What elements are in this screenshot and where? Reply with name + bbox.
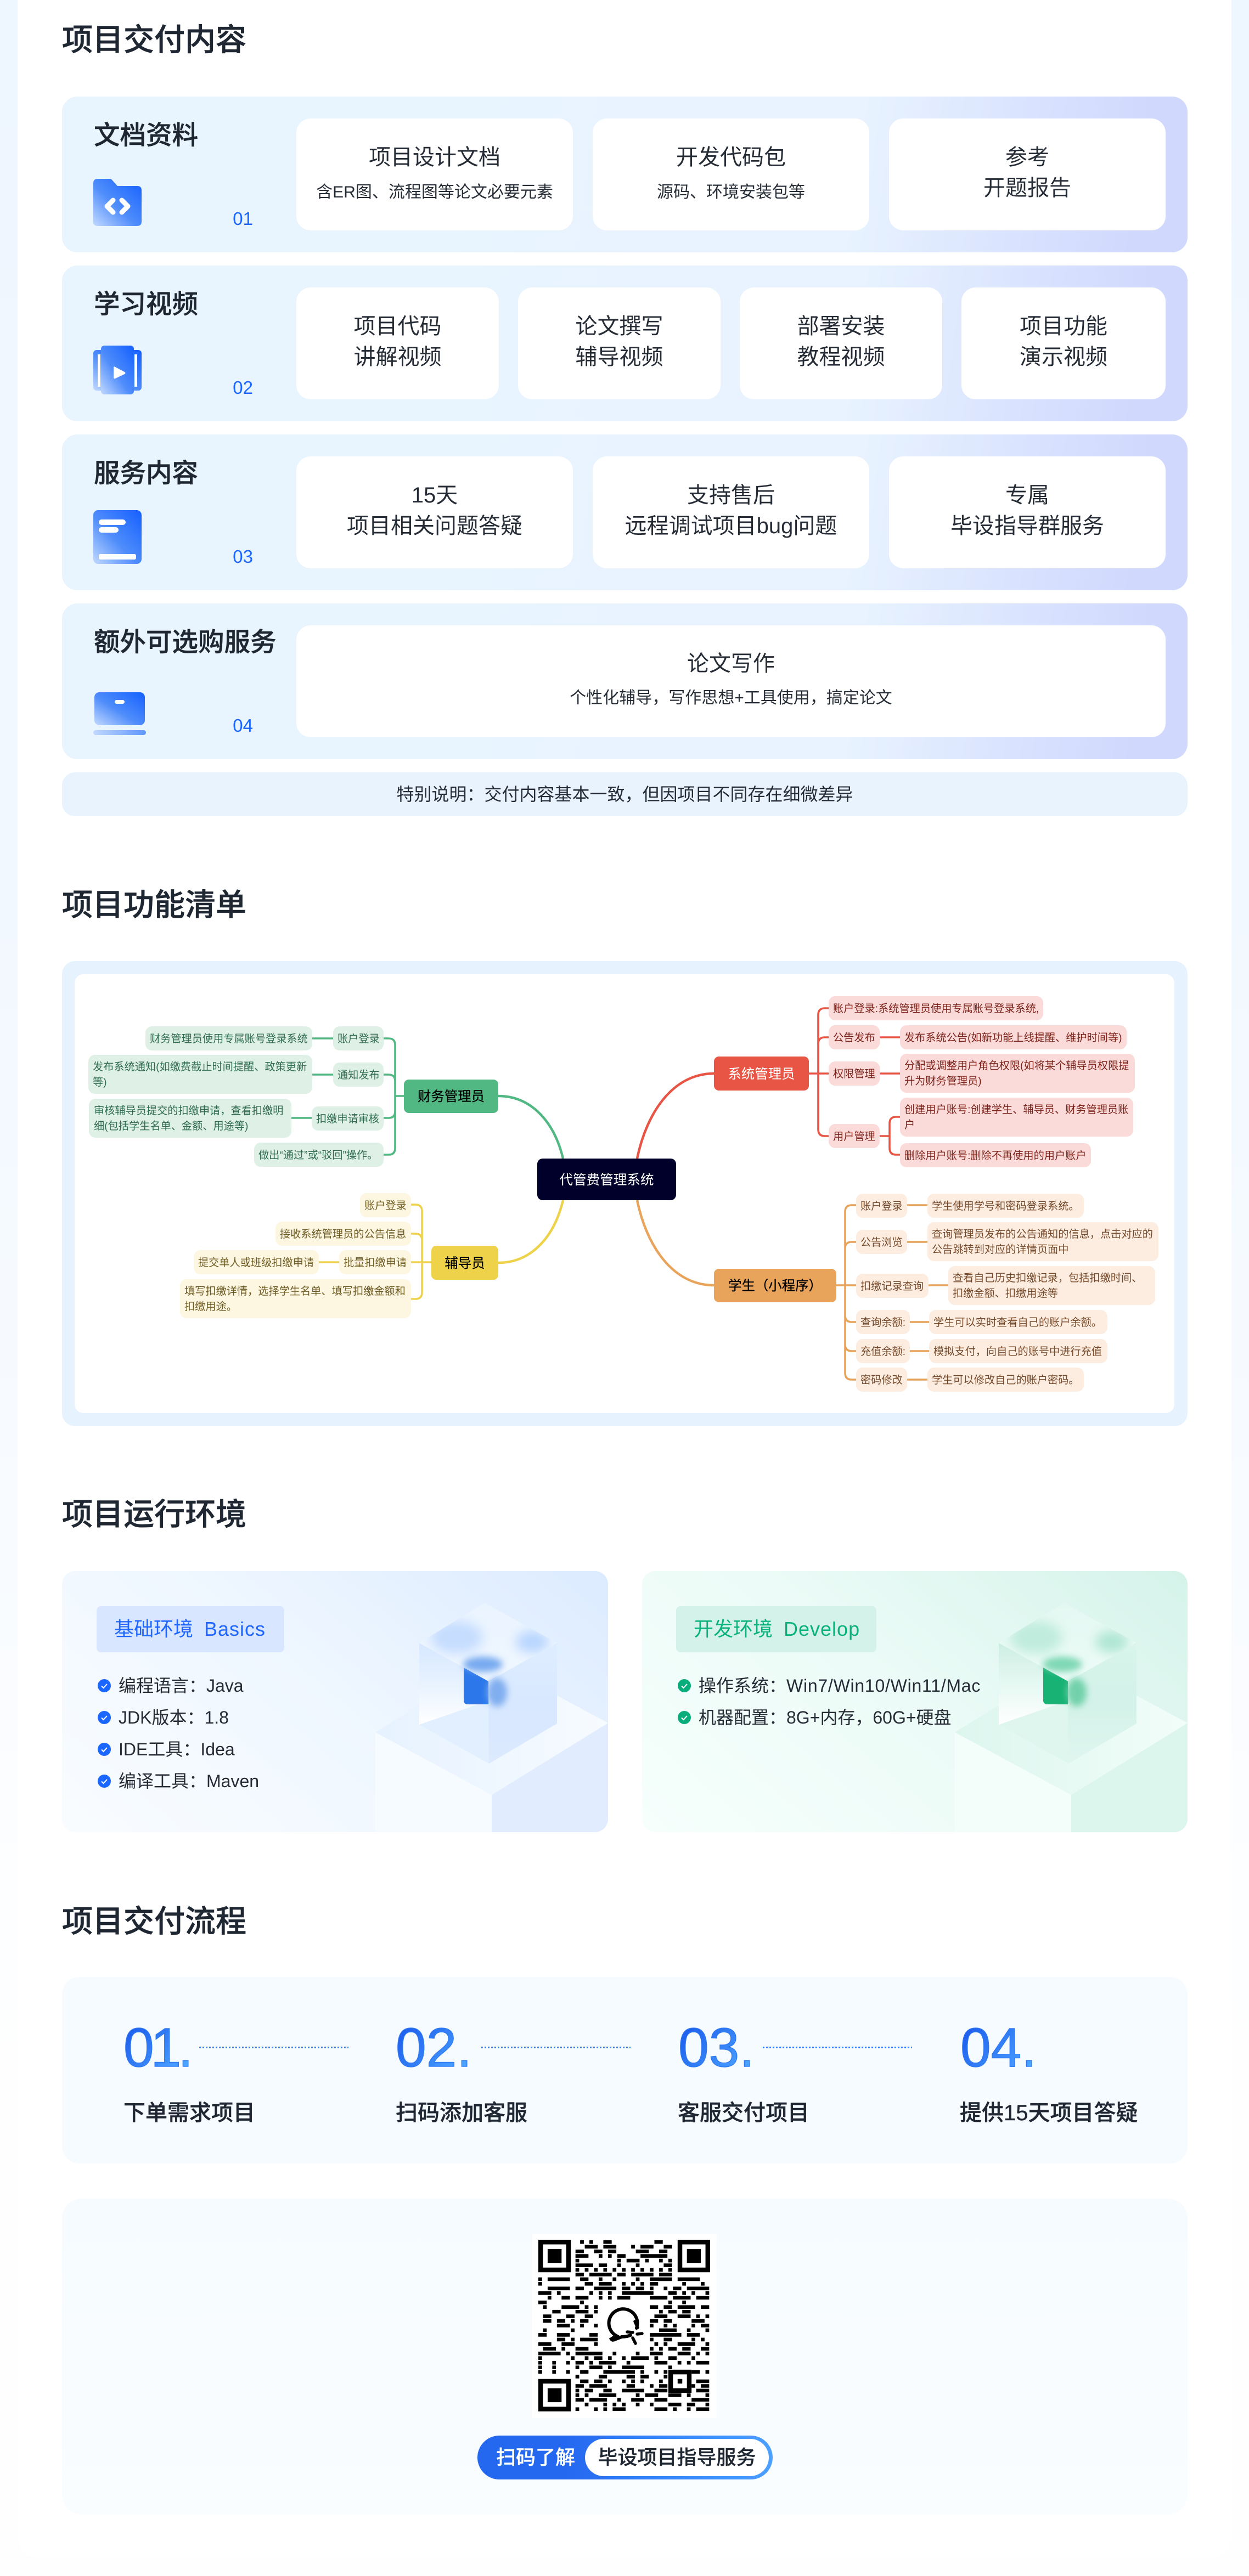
- panel: 学习视频: [62, 265, 1188, 421]
- orange leaf nodes: 扣缴记录查询: [860, 1280, 924, 1292]
- heading: 服务内容: 服务内容: [94, 459, 198, 488]
- branch node: 学生（小程序）: [714, 1269, 836, 1302]
- orange leaf nodes: 密码修改: [860, 1374, 903, 1386]
- green leaf nodes: 等): [93, 1076, 107, 1088]
- card: 部署安装教程视频: 教程视频: [797, 345, 885, 369]
- yellow leaf nodes: 接收系统管理员的公告信息: [280, 1228, 406, 1240]
- card: 论文撰写辅导视频: 论文撰写: [575, 314, 663, 338]
- branch node: 财务管理员: 财务管理员: [418, 1089, 485, 1104]
- note: 特别说明：交付内容基本一致，但因项目不同存在细微差异: [396, 784, 853, 804]
- card: 项目功能演示视频: [961, 287, 1166, 399]
- yellow leaf nodes: 账户登录: [364, 1200, 407, 1212]
- orange leaf nodes: [856, 1194, 1158, 1392]
- red leaf nodes: [829, 996, 1135, 1167]
- red leaf nodes: 删除用户账号:删除不再使用的用户账户: [904, 1150, 1087, 1162]
- card: 专属毕设指导群服务: 毕设指导群服务: [950, 514, 1104, 538]
- orange leaf nodes: 公告浏览: [860, 1236, 903, 1249]
- step number 01: 01.: [123, 2017, 190, 2078]
- card: 开发代码包: 源码、环境安装包等: [657, 183, 805, 201]
- button pill: 扫码了解 毕设项目指导服务: [477, 2436, 773, 2479]
- pill left text: 扫码了解: [496, 2446, 575, 2468]
- icon: WeCom logo: [609, 2309, 642, 2343]
- card: 15天 项目相关问题答疑: 15天: [412, 483, 458, 507]
- card: 15天 项目相关问题答疑: 项目相关问题答疑: [347, 514, 522, 538]
- card: 参考开题报告: 参考: [1005, 145, 1049, 170]
- yellow leaf nodes: 填写扣缴详情，选择学生名单、填写扣缴金额和: [184, 1285, 406, 1297]
- step number 04: 04.: [960, 2017, 1037, 2078]
- green leaf nodes: 扣缴申请审核: [316, 1113, 379, 1125]
- green leaf nodes: 细(包括学生名单、金额、用途等): [94, 1120, 248, 1132]
- heading: 文档资料: 文档资料: [94, 121, 198, 150]
- card: 专属毕设指导群服务: 专属: [1005, 483, 1049, 507]
- red leaf nodes: 用户管理: [833, 1131, 875, 1143]
- card: 论文写作: 论文写作: [687, 652, 775, 676]
- panel: 基础环境 Basics: [62, 1571, 608, 1832]
- number 03: 03: [233, 546, 253, 567]
- red leaf nodes: 公告发布: [833, 1032, 875, 1044]
- red leaf nodes: 升为财务管理员): [904, 1075, 982, 1087]
- heading: 学习视频: 学习视频: [94, 290, 198, 319]
- branch node: 系统管理员: 系统管理员: [728, 1067, 795, 1082]
- illustration: glass cube: [955, 1615, 1188, 1832]
- panel: 文档资料: [62, 97, 1188, 252]
- card: 论文写作: 个性化辅导，写作思想+工具使用，搞定论文: [570, 689, 892, 707]
- card: 论文撰写辅导视频: [518, 287, 721, 399]
- icon: laptop: [93, 692, 146, 735]
- step label 02: 扫码添加客服: [396, 2101, 527, 2125]
- label: 基础环境 Basics: 基础环境 Basics: [114, 1618, 266, 1640]
- pill right label: [585, 2439, 769, 2476]
- list item: 机器配置: 机器配置：8G+内存，60G+硬盘: [699, 1708, 952, 1727]
- icon: service doc: [93, 510, 142, 564]
- card: 参考开题报告: [889, 118, 1166, 230]
- title: 项目运行环境: 项目运行环境: [62, 1497, 246, 1532]
- panel: 开发环境 Develop: [642, 1571, 1188, 1832]
- branch node: 财务管理员: [404, 1080, 498, 1113]
- panel: QR contact: [62, 2199, 1188, 2515]
- center node: 代管费管理系统: 代管费管理系统: [559, 1172, 654, 1188]
- orange leaf nodes: 查询余额:: [860, 1317, 905, 1329]
- pill right label: 毕设项目指导服务: [598, 2446, 756, 2468]
- step number 02: 02.: [396, 2017, 472, 2078]
- connector: [481, 2047, 631, 2048]
- number 04: 04: [233, 715, 253, 736]
- orange leaf nodes: 账户登录: [860, 1200, 903, 1212]
- list item: 编译工具: 编译工具：Maven: [119, 1771, 259, 1791]
- card: 项目设计文档: 项目设计文档: [369, 145, 500, 170]
- green leaf nodes: 账户登录: [337, 1033, 380, 1045]
- list item: 操作系统: 操作系统：Win7/Win10/Win11/Mac: [699, 1676, 981, 1696]
- red leaf nodes: 账户登录:系统管理员使用专属账号登录系统,: [833, 1003, 1039, 1015]
- card: 项目设计文档: [296, 118, 573, 230]
- orange leaf nodes: 扣缴金额、扣缴用途等: [953, 1287, 1058, 1300]
- connector: [199, 2047, 348, 2048]
- orange leaf nodes: 公告跳转到对应的详情页面中: [932, 1244, 1068, 1256]
- title: 项目功能清单: 项目功能清单: [62, 888, 246, 922]
- red leaf nodes: 权限管理: [833, 1068, 875, 1080]
- card: 项目功能演示视频: 演示视频: [1020, 345, 1107, 369]
- card: 项目功能演示视频: 项目功能: [1020, 314, 1107, 338]
- card: 部署安装教程视频: 部署安装: [797, 314, 885, 338]
- green leaf nodes: 做出“通过”或“驳回”操作。: [258, 1149, 378, 1161]
- red leaf nodes: 户: [904, 1119, 915, 1131]
- card: 论文写作: [296, 625, 1166, 737]
- number 02: 02: [233, 377, 253, 398]
- card: 开发代码包: 开发代码包: [676, 145, 786, 170]
- list item: 编程语言: 编程语言：Java: [119, 1676, 244, 1696]
- card: 15天 项目相关问题答疑: [296, 456, 573, 568]
- red leaf nodes: 分配或调整用户角色权限(如将某个辅导员权限提: [904, 1060, 1129, 1072]
- card: 项目代码讲解视频: 讲解视频: [353, 345, 441, 369]
- orange leaf nodes: 学生使用学号和密码登录系统。: [932, 1200, 1079, 1212]
- green leaf nodes: [88, 1026, 384, 1167]
- branch node: 系统管理员: [714, 1057, 809, 1091]
- orange leaf nodes: 查看自己历史扣缴记录，包括扣缴时间、: [953, 1272, 1142, 1284]
- step label 03: 客服交付项目: [678, 2101, 809, 2125]
- green leaf nodes: 审核辅导员提交的扣缴申请，查看扣缴明: [94, 1105, 283, 1117]
- card: 项目代码讲解视频: [296, 287, 499, 399]
- step label 01: 下单需求项目: [123, 2101, 255, 2125]
- panel: 服务内容: [62, 434, 1188, 590]
- panel: mind map: [62, 961, 1188, 1426]
- orange leaf nodes: 学生可以修改自己的账户密码。: [932, 1374, 1079, 1386]
- label: 开发环境 Develop: [676, 1606, 876, 1652]
- title: 项目交付内容: 项目交付内容: [62, 22, 246, 57]
- number 01: 01: [233, 208, 253, 229]
- card: 项目代码讲解视频: 项目代码: [353, 314, 441, 338]
- step number 03: 03.: [678, 2017, 755, 2078]
- heading: 额外可选购服务: 额外可选购服务: [94, 628, 277, 657]
- card: 支持售后: 远程调试项目bug问题: [625, 514, 837, 538]
- orange leaf nodes: 模拟支付，向自己的账号中进行充值: [933, 1346, 1102, 1358]
- yellow leaf nodes: [180, 1193, 411, 1318]
- card: 部署安装教程视频: [740, 287, 942, 399]
- label: 基础环境 Basics: [97, 1606, 284, 1652]
- connector: [763, 2047, 912, 2048]
- green leaf nodes: 发布系统通知(如缴费截止时间提醒、政策更新: [93, 1061, 307, 1073]
- note: [62, 772, 1188, 816]
- panel: delivery flow: [62, 1977, 1188, 2163]
- branch node: 学生（小程序）: 学生（小程序）: [728, 1279, 822, 1293]
- icon: code folder: [93, 179, 142, 226]
- list item: JDK版本: JDK版本：1.8: [119, 1708, 229, 1727]
- icon: video: [93, 346, 142, 394]
- card: 支持售后: [593, 456, 869, 568]
- panel: 额外可选购服务: [62, 603, 1188, 759]
- label: 开发环境 Develop: 开发环境 Develop: [694, 1618, 860, 1640]
- orange leaf nodes: 学生可以实时查看自己的账户余额。: [933, 1317, 1102, 1329]
- green leaf nodes: 财务管理员使用专属账号登录系统: [150, 1033, 308, 1045]
- card: 论文撰写辅导视频: 辅导视频: [575, 345, 663, 369]
- card: 开发代码包: [593, 118, 869, 230]
- QR code: [532, 2234, 717, 2411]
- yellow leaf nodes: 提交单人或班级扣缴申请: [198, 1257, 314, 1269]
- card: 参考开题报告: 开题报告: [983, 176, 1071, 200]
- red leaf nodes: 发布系统公告(如新功能上线提醒、维护时间等): [904, 1032, 1122, 1044]
- yellow leaf nodes: 扣缴用途。: [184, 1301, 237, 1313]
- title: 项目交付流程: 项目交付流程: [62, 1904, 246, 1939]
- connector lines: [291, 1008, 948, 1380]
- list item: IDE工具: IDE工具：Idea: [119, 1739, 235, 1759]
- green leaf nodes: 通知发布: [337, 1069, 380, 1081]
- card: 项目设计文档: 含ER图、流程图等论文必要元素: [316, 183, 553, 201]
- yellow leaf nodes: 批量扣缴申请: [344, 1257, 407, 1269]
- step label 04: 提供15天项目答疑: [960, 2101, 1138, 2125]
- card: 支持售后: 支持售后: [687, 483, 775, 507]
- illustration: glass cube: [376, 1615, 608, 1832]
- center node: 代管费管理系统: [537, 1159, 676, 1200]
- branch node: 辅导员: [431, 1246, 498, 1280]
- red leaf nodes: 创建用户账号:创建学生、辅导员、财务管理员账: [904, 1104, 1128, 1116]
- branch node: 辅导员: 辅导员: [445, 1256, 485, 1271]
- orange leaf nodes: 充值余额:: [860, 1346, 905, 1358]
- card: 专属毕设指导群服务: [889, 456, 1166, 568]
- orange leaf nodes: 查询管理员发布的公告通知的信息，点击对应的: [932, 1228, 1153, 1240]
